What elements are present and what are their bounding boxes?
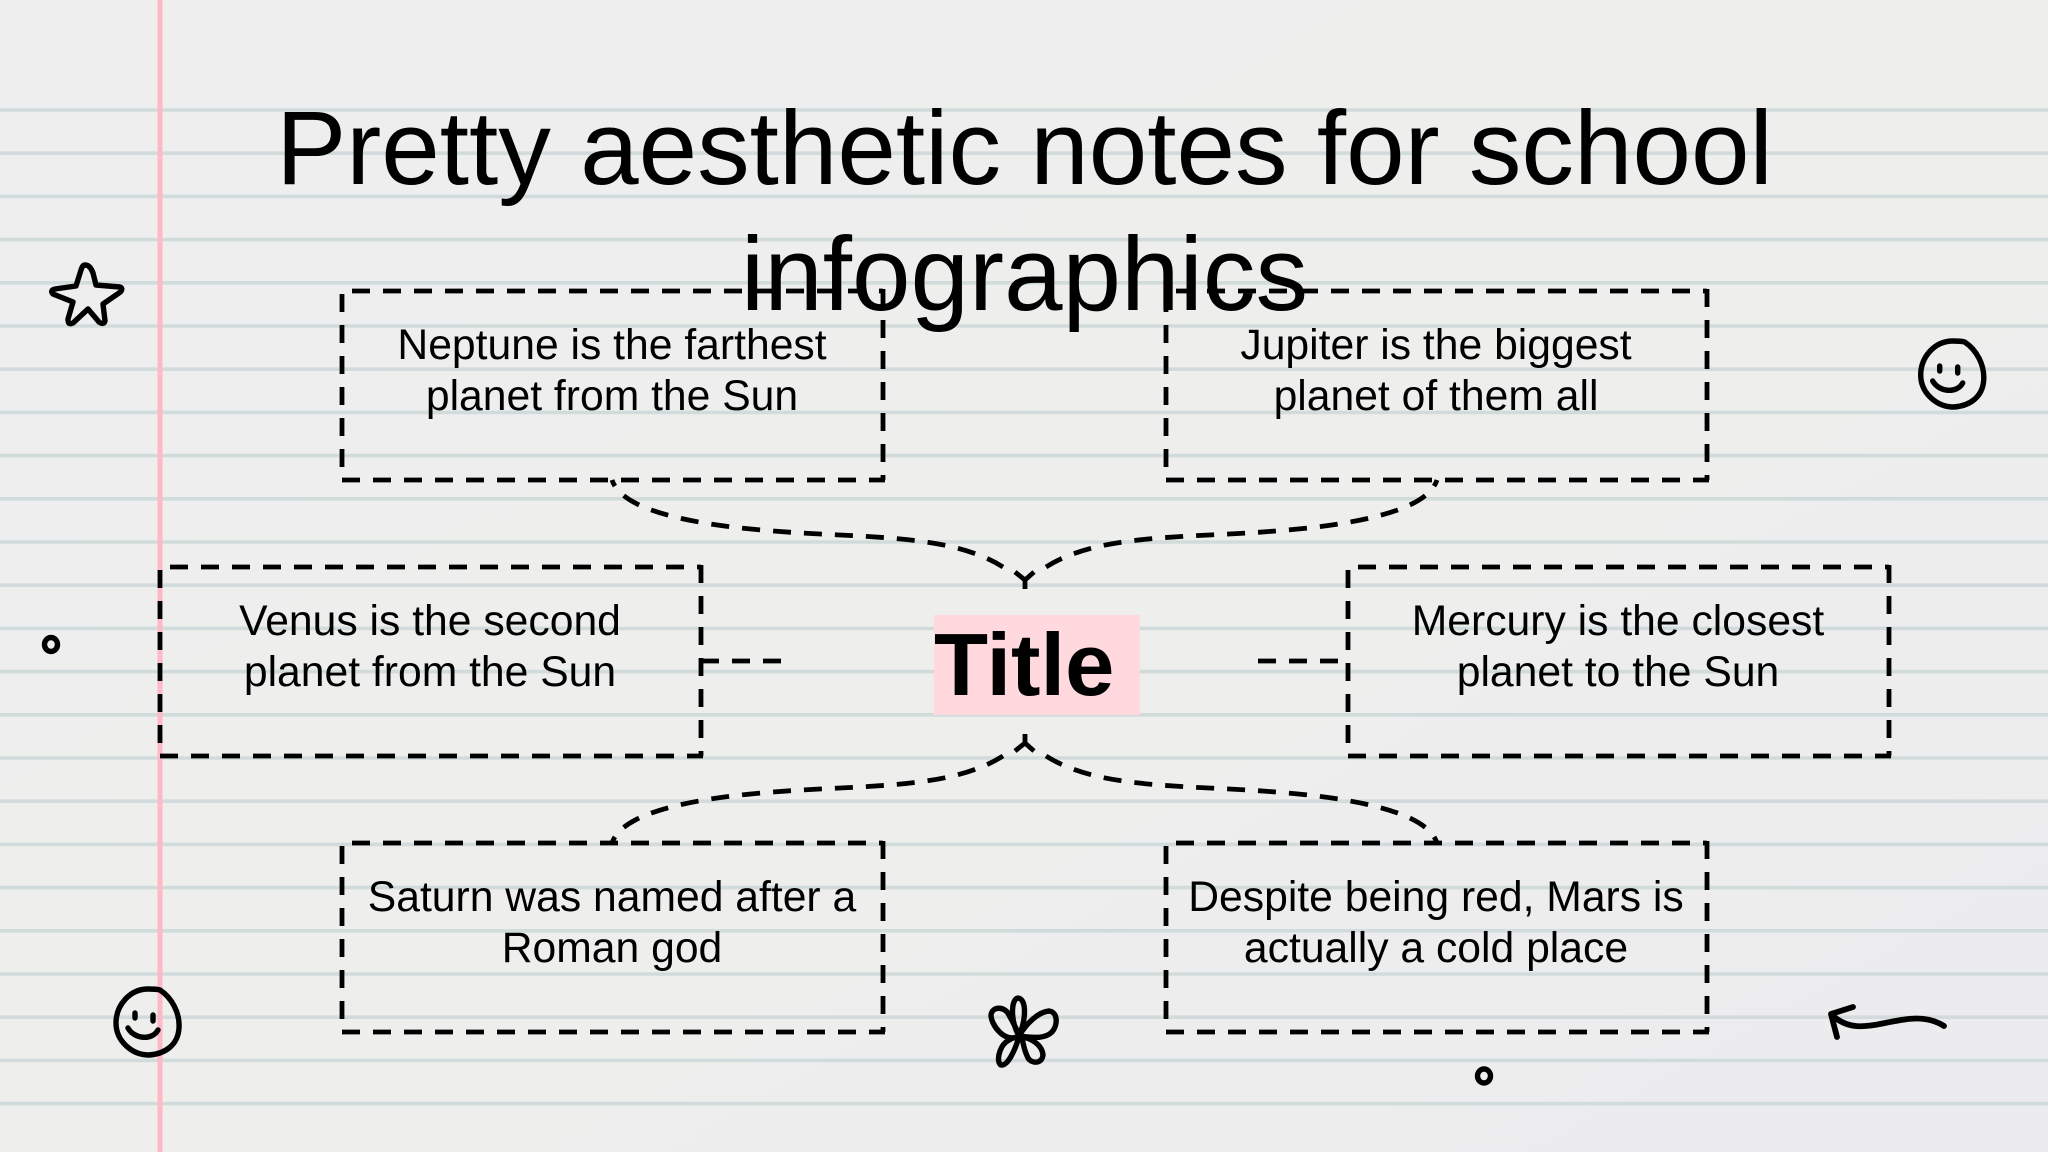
icon: flower (991, 998, 1056, 1065)
center title label: Title (934, 615, 1114, 714)
panel: Neptune (342, 289, 885, 480)
icon: star (52, 265, 122, 324)
panel: Neptune: Neptune is the farthest (397, 321, 827, 369)
arrow: top connector brace (612, 480, 1437, 589)
icon: smiley right (1921, 341, 1984, 407)
icon: small circle left (44, 638, 58, 652)
panel: Mars (1166, 841, 1709, 1032)
title: Pretty aesthetic notes for school (276, 90, 1773, 207)
title: infographics (741, 216, 1308, 333)
panel: Neptune: planet from the Sun (426, 372, 798, 420)
panel: Jupiter: planet of them all (1274, 372, 1598, 420)
panel: Mercury (1348, 565, 1891, 756)
panel: Saturn (342, 841, 885, 1032)
icon: small circle bottom (1478, 1069, 1490, 1083)
icon: smiley left (116, 989, 179, 1055)
panel: Jupiter (1166, 289, 1709, 480)
arrow: bottom connector brace (612, 734, 1437, 843)
panel: Venus: Venus is the second (239, 597, 621, 645)
panel: Mars: actually a cold place (1244, 924, 1628, 972)
panel: Venus: planet from the Sun (244, 648, 616, 696)
panel: Mercury: Mercury is the closest (1412, 597, 1824, 645)
panel: Saturn: Saturn was named after a (368, 873, 856, 921)
title (276, 90, 1773, 333)
panel: Saturn: Roman god (502, 924, 722, 972)
panel: Venus (160, 565, 703, 756)
arrow: right connector (1258, 659, 1338, 663)
panel: Mars: Despite being red, Mars is (1188, 873, 1684, 921)
panel: Mercury: planet to the Sun (1457, 648, 1779, 696)
panel: Jupiter: Jupiter is the biggest (1240, 321, 1632, 369)
icon: hand-drawn arrow (1831, 1007, 1944, 1037)
arrow: left connector (701, 659, 781, 663)
